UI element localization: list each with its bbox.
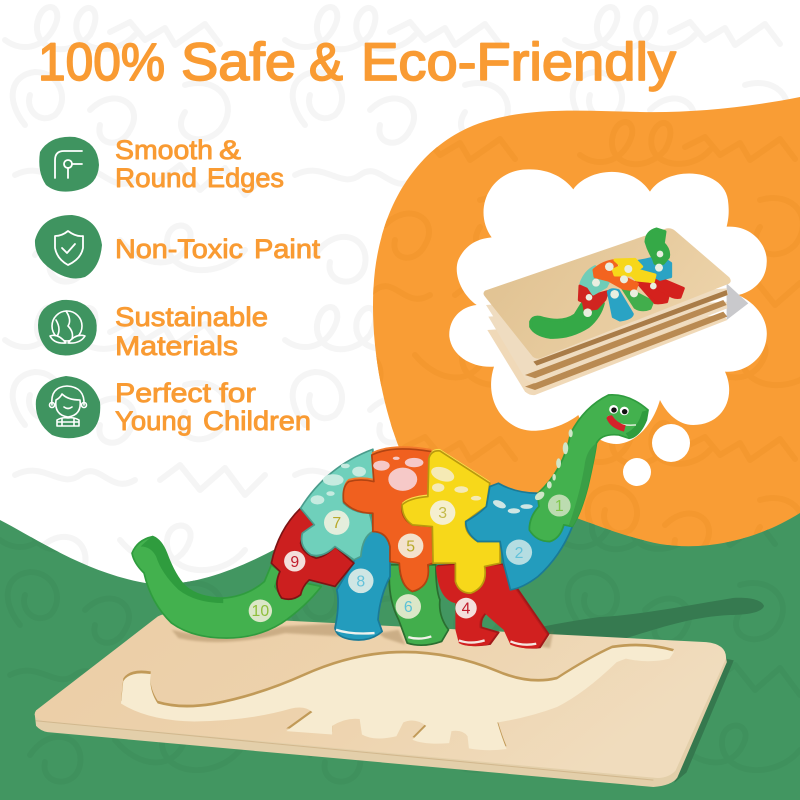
wooden dinosaur puzzle — [132, 395, 648, 648]
feature: sustainable materials — [38, 300, 268, 361]
piece 2: blue chest — [466, 483, 572, 590]
piece 3: yellow back — [402, 449, 500, 593]
icon: earth with leaves — [38, 300, 97, 356]
label: perfect for young children: Children — [203, 406, 311, 436]
dinosaur shadow on green — [470, 598, 764, 650]
piece 5: orange back: 5 — [406, 539, 415, 555]
piece 4: red legs — [436, 564, 549, 648]
wooden base board with dinosaur cutout — [35, 614, 734, 787]
label: perfect for young children: for — [219, 378, 256, 408]
label: perfect for young children: Young — [115, 406, 192, 436]
label: smooth and round edges: Edges — [207, 163, 284, 193]
cutout floor — [121, 646, 674, 750]
label: non-toxic paint: Non-Toxic — [115, 234, 243, 264]
feature: perfect for young children — [36, 376, 311, 438]
title: & — [309, 33, 343, 92]
piece 4: red legs: 4 — [462, 601, 471, 617]
stacked wooden boards — [483, 228, 748, 395]
label: smooth and round edges: Smooth — [115, 135, 213, 165]
piece 1: neck and head — [529, 395, 648, 542]
feature: smooth and round edges — [39, 135, 284, 193]
piece 1: neck and head: 1 — [555, 498, 564, 515]
icon: shield — [35, 215, 102, 278]
piece 6: leg — [389, 565, 449, 645]
label: sustainable materials: Materials — [115, 331, 238, 361]
feature: non-toxic paint — [35, 215, 321, 278]
piece 3: yellow back: 3 — [438, 505, 447, 522]
title: Eco-Friendly — [361, 33, 677, 92]
cutout rim — [121, 644, 674, 748]
icon: child — [36, 376, 100, 438]
board side shadow — [674, 659, 734, 783]
label: perfect for young children: Perfect — [115, 378, 212, 408]
board top face — [35, 614, 726, 778]
piece 10: tail — [132, 537, 321, 638]
title: 100% — [38, 33, 165, 92]
piece 2: blue chest: 2 — [515, 545, 523, 562]
dinosaur face — [606, 405, 636, 432]
thought bubble: large — [652, 424, 690, 462]
green ground — [0, 487, 800, 800]
piece 8: leg — [335, 532, 390, 640]
board front edge — [35, 655, 727, 787]
piece 10: tail: 10 — [252, 603, 269, 620]
title: Safe — [181, 33, 296, 92]
contact shadows — [172, 623, 553, 648]
icon: rounded corner — [39, 137, 99, 192]
thought cloud with stacked puzzles — [449, 169, 767, 486]
piece 9: red body: 9 — [290, 554, 299, 571]
cloud — [449, 169, 767, 444]
label: non-toxic paint: Paint — [254, 234, 321, 264]
piece 9: red body — [271, 508, 354, 599]
piece 8: leg: 8 — [356, 574, 365, 590]
mini dinosaur puzzle — [531, 229, 683, 337]
label: smooth and round edges: Round — [115, 163, 197, 193]
piece 7: teal back — [301, 449, 374, 560]
thought bubble: small — [623, 458, 651, 486]
piece 6: leg: 6 — [404, 599, 413, 616]
label: sustainable materials: Sustainable — [115, 302, 268, 332]
piece 5: orange back — [343, 446, 433, 591]
orange blob — [373, 97, 800, 600]
label: smooth and round edges: & — [219, 135, 241, 165]
piece 7: teal back: 7 — [332, 515, 341, 532]
